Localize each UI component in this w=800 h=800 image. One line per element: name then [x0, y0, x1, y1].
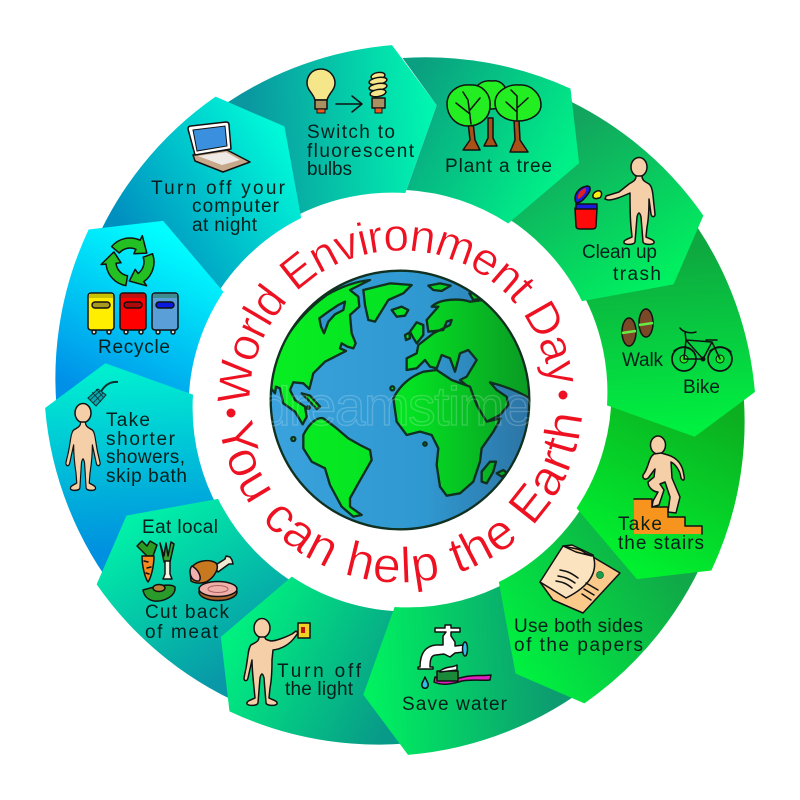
- label: switch to fluorescent bulbs: [307, 122, 415, 180]
- icon: recycling arrows: [99, 236, 162, 291]
- title: circular heading: [218, 222, 582, 592]
- separator dots: [226, 390, 568, 418]
- panel: eat local, cut back of meat: [74, 455, 348, 747]
- label: cut back of meat: of meat: [145, 622, 219, 643]
- label: turn off your computer at night: Turn off your: [151, 178, 286, 199]
- label: turn off the light: Turn off: [277, 661, 362, 682]
- icon: bicycle: [672, 328, 732, 371]
- label: take the stairs: the stairs: [618, 533, 704, 554]
- label: use both sides of the papers: of the papers: [514, 635, 643, 656]
- globe: [260, 271, 533, 529]
- icon: person under shower: [66, 382, 118, 490]
- label: plant a tree: Plant a tree: [445, 156, 552, 177]
- icon: trees: [447, 81, 541, 152]
- icon: recycling bins: [88, 293, 178, 334]
- label: turn off the light: the light: [285, 679, 354, 700]
- panel: use both sides of the papers: [455, 452, 747, 726]
- icon: shoe prints: [622, 309, 653, 346]
- label: turn off the light: [277, 661, 362, 700]
- icon: papers: [540, 545, 620, 613]
- label: take shorter showers, skip bath: Take: [106, 410, 150, 431]
- panel: recycle: [0, 191, 268, 483]
- icon: faucet and toothbrush: [418, 625, 491, 688]
- label: cut back of meat: Cut back: [145, 602, 230, 623]
- label: recycle: Recycle: [98, 337, 170, 358]
- label: save water: Save water: [402, 694, 508, 715]
- icon: person throwing trash: [605, 158, 655, 244]
- panel: take the stairs: [532, 317, 800, 609]
- panel: take shorter showers: [45, 363, 226, 596]
- icon: person at light switch: [244, 618, 310, 705]
- label: clean up trash: Clean up: [582, 242, 657, 263]
- label: switch to fluorescent bulbs: fluorescent: [307, 141, 415, 162]
- label: use both sides of the papers: [514, 616, 643, 656]
- label: turn off your computer at night: computer: [192, 196, 280, 217]
- heading: You can help the Earth: You can help the Earth: [222, 415, 582, 592]
- panel: clean up trash: [452, 53, 726, 345]
- icon: laptop: [188, 122, 250, 172]
- label: switch to fluorescent bulbs: Switch to: [307, 122, 395, 143]
- label: turn off your computer at night: [151, 178, 286, 236]
- label: walk: Walk: [622, 350, 664, 371]
- label: take shorter showers, skip bath: skip bath: [106, 466, 187, 487]
- label: take the stairs: Take: [618, 514, 662, 535]
- label: take the stairs: [618, 514, 704, 554]
- label: cut back of meat: [145, 602, 230, 643]
- label: use both sides of the papers: Use both sides: [514, 616, 643, 637]
- label: eat local: Eat local: [142, 517, 218, 538]
- panel: turn off your computer: [53, 74, 345, 348]
- panel: walk and bike: [574, 204, 755, 437]
- icon: trash bin: [575, 186, 602, 229]
- label: clean up trash: [582, 242, 661, 285]
- label: switch to fluorescent bulbs: bulbs: [307, 159, 352, 180]
- panel: turn off the light: [191, 532, 483, 800]
- label: take shorter showers, skip bath: [106, 410, 187, 487]
- icon: person climbing stairs: [634, 436, 702, 534]
- label: clean up trash: trash: [613, 264, 661, 285]
- label: take shorter showers, skip bath: shorter: [106, 429, 176, 450]
- panel: switch to fluorescent bulbs: [204, 45, 437, 226]
- label: turn off your computer at night: at night: [192, 215, 258, 236]
- icon: vegetables: [137, 541, 175, 601]
- label: bike: Bike: [683, 377, 720, 398]
- watermark: dreamstime: [260, 375, 533, 437]
- label: take shorter showers, skip bath: showers,: [106, 447, 185, 468]
- heading: World Environment Day: World Environment Day: [218, 222, 574, 402]
- icon: meat: [190, 556, 237, 600]
- panel: save water: [363, 574, 596, 755]
- panel: plant a tree: [402, 57, 579, 224]
- icon: light bulb to fluorescent bulb: [307, 69, 387, 113]
